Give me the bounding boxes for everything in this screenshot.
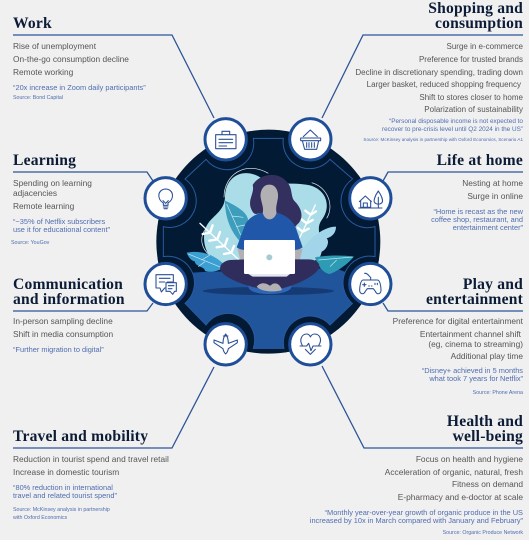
icon: airplane [205,324,246,365]
icon: game controller [350,263,391,305]
icon: house and tree [350,178,391,219]
list: shopping: Decline in discretionary spending, trading down [355,68,523,77]
list: health: E-pharmacy and e-doctor at scale [398,492,523,502]
cushion under feet [248,285,292,294]
source: health: Source: Organic Produce Network [443,530,523,536]
teal leaf [225,201,248,241]
icon: light bulb [145,178,186,219]
list: health: Focus on health and hygiene [416,454,523,464]
light blue blob [204,173,327,270]
panel: life at home [431,152,524,232]
heading: shopping [428,0,523,32]
panel: travel and mobility [13,428,169,521]
list: shopping: Preference for trusted brands [419,55,523,64]
quote: play [422,366,524,383]
quote: health [310,508,524,525]
heading: play [426,276,524,308]
list: play: Additional play time [451,351,523,361]
blue floor [186,268,352,348]
feet [257,283,282,291]
quote: life at home: “Home is recast as the new [433,207,524,216]
quote: travel: travel and related tourist spend” [13,491,117,500]
face and neck [261,185,278,220]
ground shadow [203,287,334,295]
quote: shopping: “Personal disposable income is not expected to [389,118,523,125]
icon: speech bubbles [145,263,186,305]
heading: communication [13,276,125,308]
source: work: Source: Bond Capital [13,95,63,101]
heading: travel: Travel and mobility [13,428,148,445]
panel: work [13,15,146,101]
quote: travel [13,483,117,500]
arms [237,249,303,267]
list: travel: Increase in domestic tourism [13,467,119,477]
quote: life at home: entertainment center” [453,223,524,232]
source: travel: Source: McKinsey analysis in partnership [13,507,110,513]
list: life at home [462,178,523,201]
heading: play: Play and [463,276,523,293]
list: shopping: Surge in e-commerce [447,42,524,51]
heading: work: Work [13,15,52,32]
list: communication [13,316,114,339]
list: shopping [355,42,524,114]
heading: learning: Learning [13,152,76,169]
panel: learning [11,152,110,246]
quote: learning: use it for educational content” [13,225,110,234]
list: health: Fitness on demand [452,479,523,489]
dark gear disc [156,130,380,354]
legs [220,259,319,288]
quote: life at home [431,207,524,232]
list: play: (eg, cinema to streaming) [428,339,523,349]
quote: play: what took 7 years for Netflix” [428,374,524,383]
icon: heart with pulse [290,324,331,365]
quote: communication: “Further migration to digital” [13,345,104,354]
quote: health: increased by 10x in March compared with January and February” [310,516,524,525]
list: learning [13,178,92,211]
quote: shopping: recover to pre-crisis level until Q2 2024 in the US” [382,126,523,133]
quote: play: “Disney+ achieved in 5 months [422,366,523,375]
central illustration [140,113,396,370]
laptop [244,240,295,274]
list: work: Rise of unemployment [13,41,97,51]
woman [220,175,319,291]
list: play: Preference for digital entertainment [393,316,524,326]
shirt [237,213,303,260]
list: life at home: Surge in online [467,191,523,201]
heading: shopping: Shopping and [428,0,523,17]
list: shopping: Shift to stores closer to home [419,93,524,102]
icon: briefcase [205,119,246,160]
heading: health: well-being [453,428,523,445]
icon: basket [290,119,331,160]
quote: shopping [382,118,523,133]
blob outline curves [202,168,330,257]
heading: communication: Communication [13,276,123,293]
heading: play: entertainment [426,291,524,308]
list: communication: In-person sampling decline [13,316,113,326]
connector lines [13,35,523,448]
quote: learning [13,217,110,234]
panel: health and well-being [310,413,524,536]
list: travel [13,454,169,477]
source: learning: Source: YouGov [11,240,50,246]
heading: communication: and information [13,291,125,308]
list: communication: Shift in media consumption [13,329,114,339]
list: life at home: Nesting at home [462,178,523,188]
list: play [393,316,524,361]
source: travel [13,507,110,521]
left blue leaf [187,252,227,272]
quote: health: “Monthly year-over-year growth of organic produce in the US [325,508,523,517]
heading: health: Health and [447,413,523,430]
list: work: Remote working [13,67,74,77]
quote: learning: “~35% of Netflix subscribers [13,217,106,226]
icon rims [158,131,379,352]
list: play: Entertainment channel shift [420,329,522,339]
list: travel: Reduction in tourist spend and travel retail [13,454,169,464]
list: shopping: Polarization of sustainability [424,105,523,114]
source: travel: with Oxford Economics [13,515,68,521]
panel: communication and information [13,276,125,354]
list: health: Acceleration of organic, natural, fresh [385,467,523,477]
list: work: On-the-go consumption decline [13,54,129,64]
panel: play and entertainment [393,276,524,396]
source: play: Source: Phone Arena [473,390,523,396]
list: shopping: Larger basket, reduced shopping frequency [367,80,521,89]
quote: life at home: coffee shop, restaurant, and [431,215,523,224]
quote: work: “20x increase in Zoom daily participants” [13,83,146,92]
right light blue leaf [297,227,336,264]
list: learning: Spending on learning [13,178,92,188]
panel: shopping and consumption [355,0,524,142]
list: health [385,454,523,502]
heading: life at home: Life at home [437,152,523,169]
heading: health [447,413,523,445]
hair [250,175,301,229]
heading: shopping: consumption [435,15,523,32]
list: learning: adjacencies [13,188,57,198]
list: work [13,41,129,77]
gear outline [163,138,375,348]
source: shopping: Source: McKinsey analysis in partnership with Oxford Economics, Scenario A1 [363,137,523,142]
white ferns [200,205,316,259]
right teal leaf [315,255,354,274]
quote: travel: “80% reduction in international [13,483,113,492]
list: learning: Remote learning [13,201,75,211]
